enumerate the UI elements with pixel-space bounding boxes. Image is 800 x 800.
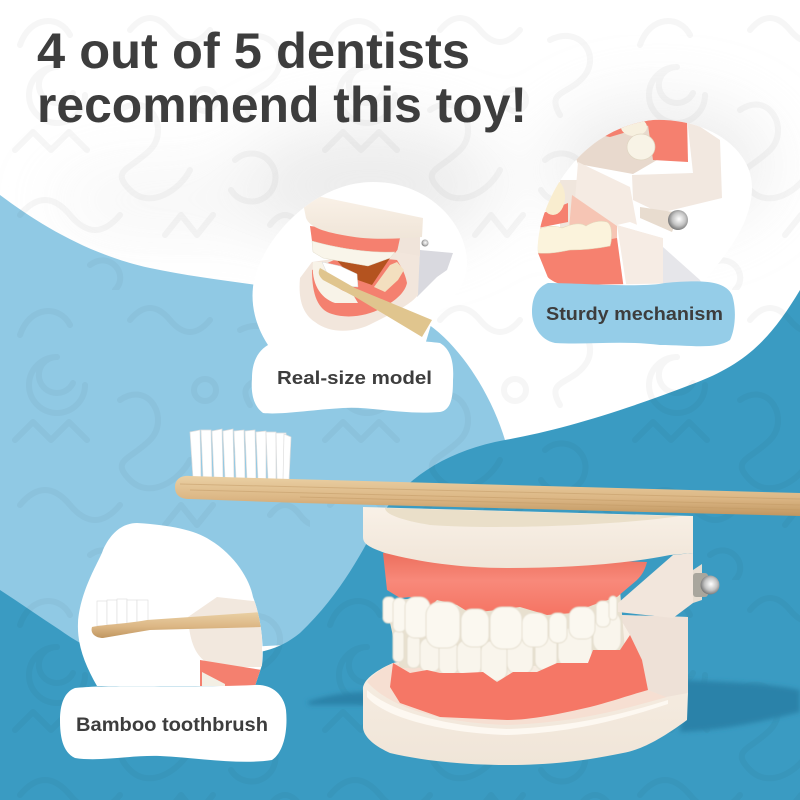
blob: bamboo photo background — [78, 523, 263, 686]
teeth backing — [385, 590, 625, 668]
hinge upper block — [618, 553, 693, 618]
main bamboo toothbrush — [175, 429, 800, 516]
shadow: main toy on the surface — [307, 680, 800, 732]
panel: sturdy mechanism — [532, 118, 752, 346]
blob: sturdy photo background — [538, 120, 752, 285]
bristles — [190, 429, 291, 480]
label box: real-size model — [252, 339, 453, 413]
panel: real-size model — [252, 182, 467, 413]
label: real-size model: Real-size model — [277, 367, 432, 388]
upper gum — [383, 553, 647, 615]
hinge nut — [693, 564, 720, 603]
lower jaw base — [363, 615, 688, 765]
background: soft grey shading — [50, 105, 770, 245]
photo: brush over model — [92, 597, 262, 690]
lower jaw rim — [367, 690, 668, 735]
photo: small teeth model with brush — [300, 196, 453, 337]
lower gum — [390, 635, 648, 720]
lower teeth — [393, 611, 621, 681]
hinge lower block — [618, 615, 688, 697]
title — [37, 23, 527, 133]
wood grain — [180, 484, 800, 510]
label box: sturdy mechanism — [532, 281, 735, 346]
background: dark blue wave — [0, 290, 800, 800]
blob: real-size photo background — [253, 182, 467, 345]
title: recommend this toy! — [37, 77, 527, 133]
handle — [175, 476, 800, 516]
main toy: teeth model — [363, 507, 720, 765]
panel: bamboo toothbrush — [60, 523, 286, 762]
label box: bamboo toothbrush — [60, 685, 286, 762]
photo: hinge close-up — [536, 118, 722, 290]
label: sturdy mechanism: Sturdy mechanism — [546, 303, 723, 324]
lower jaw top surface — [367, 663, 667, 725]
upper jaw top surface — [385, 508, 680, 527]
background: light blue wave — [0, 195, 505, 660]
title: 4 out of 5 dentists — [37, 23, 470, 79]
upper teeth — [383, 596, 617, 649]
upper jaw base — [363, 507, 693, 568]
label: bamboo toothbrush: Bamboo toothbrush — [76, 715, 268, 736]
